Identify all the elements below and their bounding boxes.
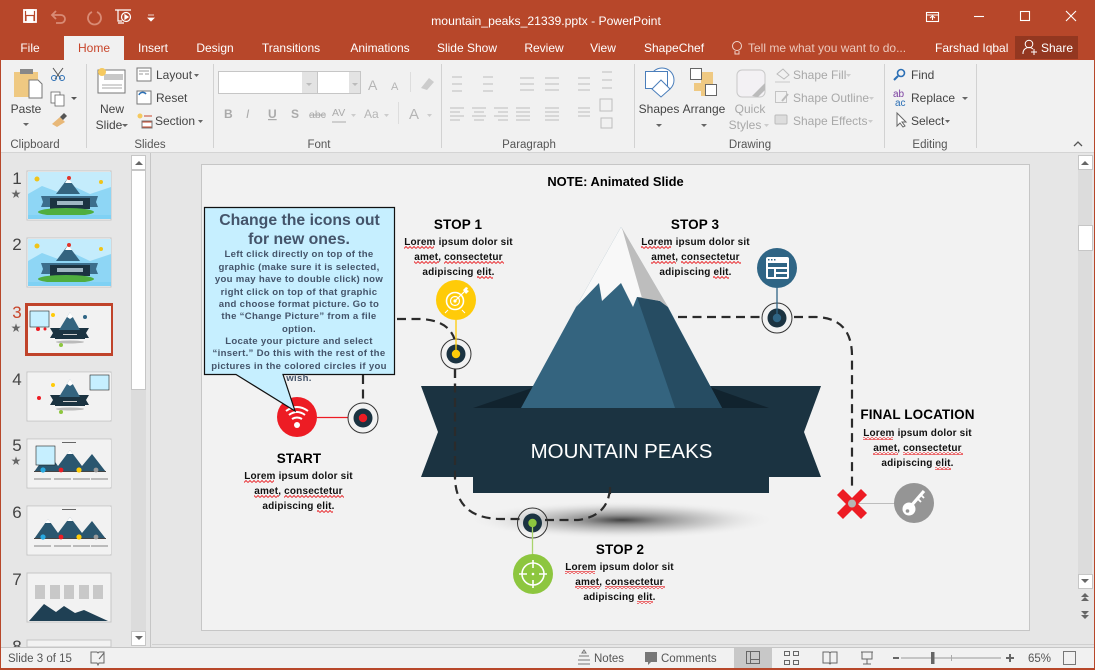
banner fold — [473, 387, 769, 408]
slides group: Slide — [96, 118, 123, 132]
text block: stop 1: amet, consectetur — [414, 252, 503, 263]
icon: key — [894, 483, 934, 523]
ribbon — [0, 60, 1095, 153]
ribbon tabs: Animations — [350, 41, 410, 55]
share button — [1015, 36, 1078, 59]
text block: start: START — [277, 451, 322, 466]
text block: stop 1: adipiscing elit. — [422, 267, 495, 278]
slides group — [96, 68, 203, 151]
thumbnail 2 — [12, 235, 111, 287]
thumbnail 7: 7 — [12, 570, 22, 589]
text block: stop 3 — [641, 217, 750, 279]
callout: wish. — [285, 373, 312, 384]
ribbon tabs: Design — [196, 41, 234, 55]
ribbon tabs: ShapeChef — [644, 41, 705, 55]
drawing group: Styles — [729, 118, 761, 132]
editing group: Find — [911, 68, 934, 82]
text block: stop 3: adipiscing elit. — [659, 267, 732, 278]
connector: stop 2 lower dash — [609, 487, 611, 494]
callout: option. — [282, 324, 316, 335]
text block: stop 3: amet, consectetur — [651, 252, 740, 263]
text block: final location: FINAL LOCATION — [860, 407, 975, 422]
thumbnail 6: 6 — [12, 503, 22, 522]
text block: stop 1: STOP 1 — [434, 217, 482, 232]
view buttons — [734, 648, 873, 668]
text block: stop 2: adipiscing elit. — [583, 592, 656, 603]
callout: Locate your picture and select — [225, 336, 373, 347]
editing group: Replace — [911, 91, 955, 105]
thumbnail 7 — [12, 570, 111, 622]
font group: abc — [309, 109, 326, 121]
thumbnail 3 selected — [11, 303, 112, 354]
slides group: Slides — [134, 139, 166, 151]
font group: A — [409, 106, 419, 123]
font group — [218, 72, 434, 151]
icon: browser window — [757, 248, 797, 288]
callout: pictures in the colored circles if you — [211, 361, 387, 372]
callout: Left click directly on top of the — [224, 249, 374, 260]
text block: stop 1: Lorem ipsum dolor sit — [404, 237, 513, 248]
paragraph group — [450, 72, 612, 151]
icon: red x marker — [843, 495, 861, 513]
thumbnail 1: 1 — [12, 169, 22, 188]
slides group: Reset — [156, 91, 188, 105]
slides group: Section — [155, 114, 195, 128]
text block: stop 2 — [565, 542, 674, 604]
icon: lightbulb — [732, 42, 742, 54]
thumbnail 4: 4 — [12, 370, 22, 389]
thumbnail 5 — [11, 436, 111, 488]
thumbnail 8 — [12, 637, 111, 656]
window title: mountain_peaks_21339.pptx - PowerPoint — [431, 14, 661, 28]
text block: start: amet, consectetur — [254, 486, 343, 497]
text block: stop 3: Lorem ipsum dolor sit — [641, 237, 750, 248]
thumbnail 1 — [11, 169, 111, 220]
callout — [204, 208, 394, 411]
banner front — [473, 408, 769, 493]
node: final location — [843, 495, 895, 513]
callout: Change the icons out — [219, 212, 381, 229]
font group: A — [368, 77, 378, 93]
text block: stop 2: amet, consectetur — [575, 577, 664, 588]
drawing group: Quick — [735, 102, 766, 116]
text block: start — [244, 451, 353, 513]
callout: the “Change Picture” from a file — [221, 311, 377, 322]
clipboard group: Clipboard — [10, 139, 60, 151]
icon: save — [24, 10, 36, 22]
node: stop 2 — [518, 508, 548, 556]
comments button: Comments — [661, 653, 717, 665]
paragraph group: Paragraph — [502, 139, 556, 151]
font group: I — [246, 107, 250, 121]
thumbnail 5: 5 — [12, 436, 22, 455]
text block: stop 2: Lorem ipsum dolor sit — [565, 562, 674, 573]
drawing group: Shape Fill — [793, 68, 846, 82]
ribbon tabs: File — [20, 41, 40, 55]
thumbnail 4 — [12, 370, 111, 421]
note heading: NOTE: Animated Slide — [547, 174, 684, 189]
title bar — [0, 0, 1095, 60]
ribbon tabs: View — [590, 41, 616, 55]
drawing group: Shapes — [639, 102, 679, 116]
icon: quick access menu — [148, 15, 154, 21]
route segment over banner — [454, 369, 456, 478]
shadow under banner — [467, 501, 777, 539]
drawing group: Shape Effects — [793, 114, 868, 128]
editing group: Select — [911, 114, 945, 128]
window controls — [926, 11, 1076, 22]
callout: you may have to double click) now — [215, 274, 383, 285]
ribbon tabs: Review — [524, 41, 564, 55]
drawing group — [639, 68, 874, 151]
thumbnail 3 selected: 3 — [12, 303, 22, 322]
icon: slideshow — [115, 10, 131, 23]
thumbnail 6 — [12, 503, 111, 555]
node: start — [317, 403, 378, 433]
drawing group: Arrange — [683, 102, 726, 116]
share button: Share — [1041, 41, 1073, 55]
icon: undo and redo — [52, 11, 101, 25]
callout: and choose format picture. Go to — [219, 299, 379, 310]
slides group: New — [100, 102, 124, 116]
ribbon tabs: Home — [78, 41, 110, 55]
ribbon tabs: Slide Show — [437, 41, 497, 55]
ribbon tabs — [20, 36, 1078, 60]
text block: stop 1 — [404, 217, 513, 279]
font group: A — [391, 81, 399, 93]
thumbnail 5: ★ — [11, 454, 21, 468]
status bar: Slide 3 of 15 — [8, 653, 72, 665]
text block: final location: amet, consectetur — [873, 443, 962, 454]
thumbnail 1: ★ — [11, 187, 21, 201]
text block: start: adipiscing elit. — [262, 501, 335, 512]
shapes icon — [646, 68, 674, 97]
ribbon tabs: Insert — [138, 41, 169, 55]
icon: crosshair — [513, 554, 553, 594]
text block: stop 3: STOP 3 — [671, 217, 719, 232]
editing group: ac — [895, 98, 906, 109]
thumbnail 8: 8 — [12, 637, 22, 656]
notes button: Notes — [594, 653, 624, 665]
clipboard group — [10, 68, 77, 151]
thumbnail 3 selected: ★ — [11, 321, 21, 335]
font group: B — [224, 107, 233, 121]
thumbnail 2: 2 — [12, 235, 22, 254]
text block: final location: adipiscing elit. — [881, 458, 954, 469]
shape commands — [777, 69, 789, 79]
editor scrollbar — [1078, 156, 1092, 619]
callout: for new ones. — [248, 231, 350, 248]
text block: final location: Lorem ipsum dolor sit — [863, 428, 972, 439]
text block: final location — [860, 407, 975, 470]
ribbon tabs: Tell me what you want to do... — [748, 41, 906, 55]
font group: S — [291, 107, 299, 121]
quick styles icon — [737, 70, 765, 97]
panel: slide thumbnails — [0, 153, 151, 656]
banner tails — [421, 386, 821, 477]
font group: Aa — [364, 107, 379, 121]
clipboard group: Paste — [11, 102, 42, 116]
slide — [202, 164, 1030, 630]
font group: Font — [307, 139, 331, 151]
zoom slider: 65% — [1028, 653, 1051, 665]
thumbnail scrollbar — [131, 155, 146, 646]
text block: start: Lorem ipsum dolor sit — [244, 471, 353, 482]
banner — [421, 227, 821, 493]
editing group: ab — [893, 89, 905, 100]
font group: U — [268, 107, 277, 121]
text block: stop 2: STOP 2 — [596, 542, 644, 557]
node: stop 3 — [762, 288, 792, 333]
slides group: Layout — [156, 68, 193, 82]
arrange icon — [690, 68, 716, 96]
dashed route — [363, 317, 852, 520]
editing group — [893, 68, 1082, 151]
mountain — [521, 227, 722, 408]
callout: “insert.” Do this with the rest of the — [213, 348, 385, 359]
callout: graphic (make sure it is selected, — [218, 262, 380, 273]
icon: wifi — [277, 397, 317, 437]
zoom slider — [893, 652, 1076, 665]
ribbon tabs: Transitions — [262, 41, 320, 55]
status bar — [0, 644, 1095, 670]
icon: target — [436, 280, 476, 320]
editing group: Editing — [912, 139, 948, 151]
callout: right click on top of that graphic — [221, 287, 378, 298]
ribbon tabs: Farshad Iqbal — [935, 41, 1008, 55]
drawing group: Shape Outline — [793, 91, 869, 105]
font group: AV — [332, 107, 345, 119]
drawing group: Drawing — [729, 139, 771, 151]
banner title: MOUNTAIN PEAKS — [531, 440, 712, 463]
node: stop 1 — [441, 320, 471, 369]
notes button — [578, 650, 624, 665]
